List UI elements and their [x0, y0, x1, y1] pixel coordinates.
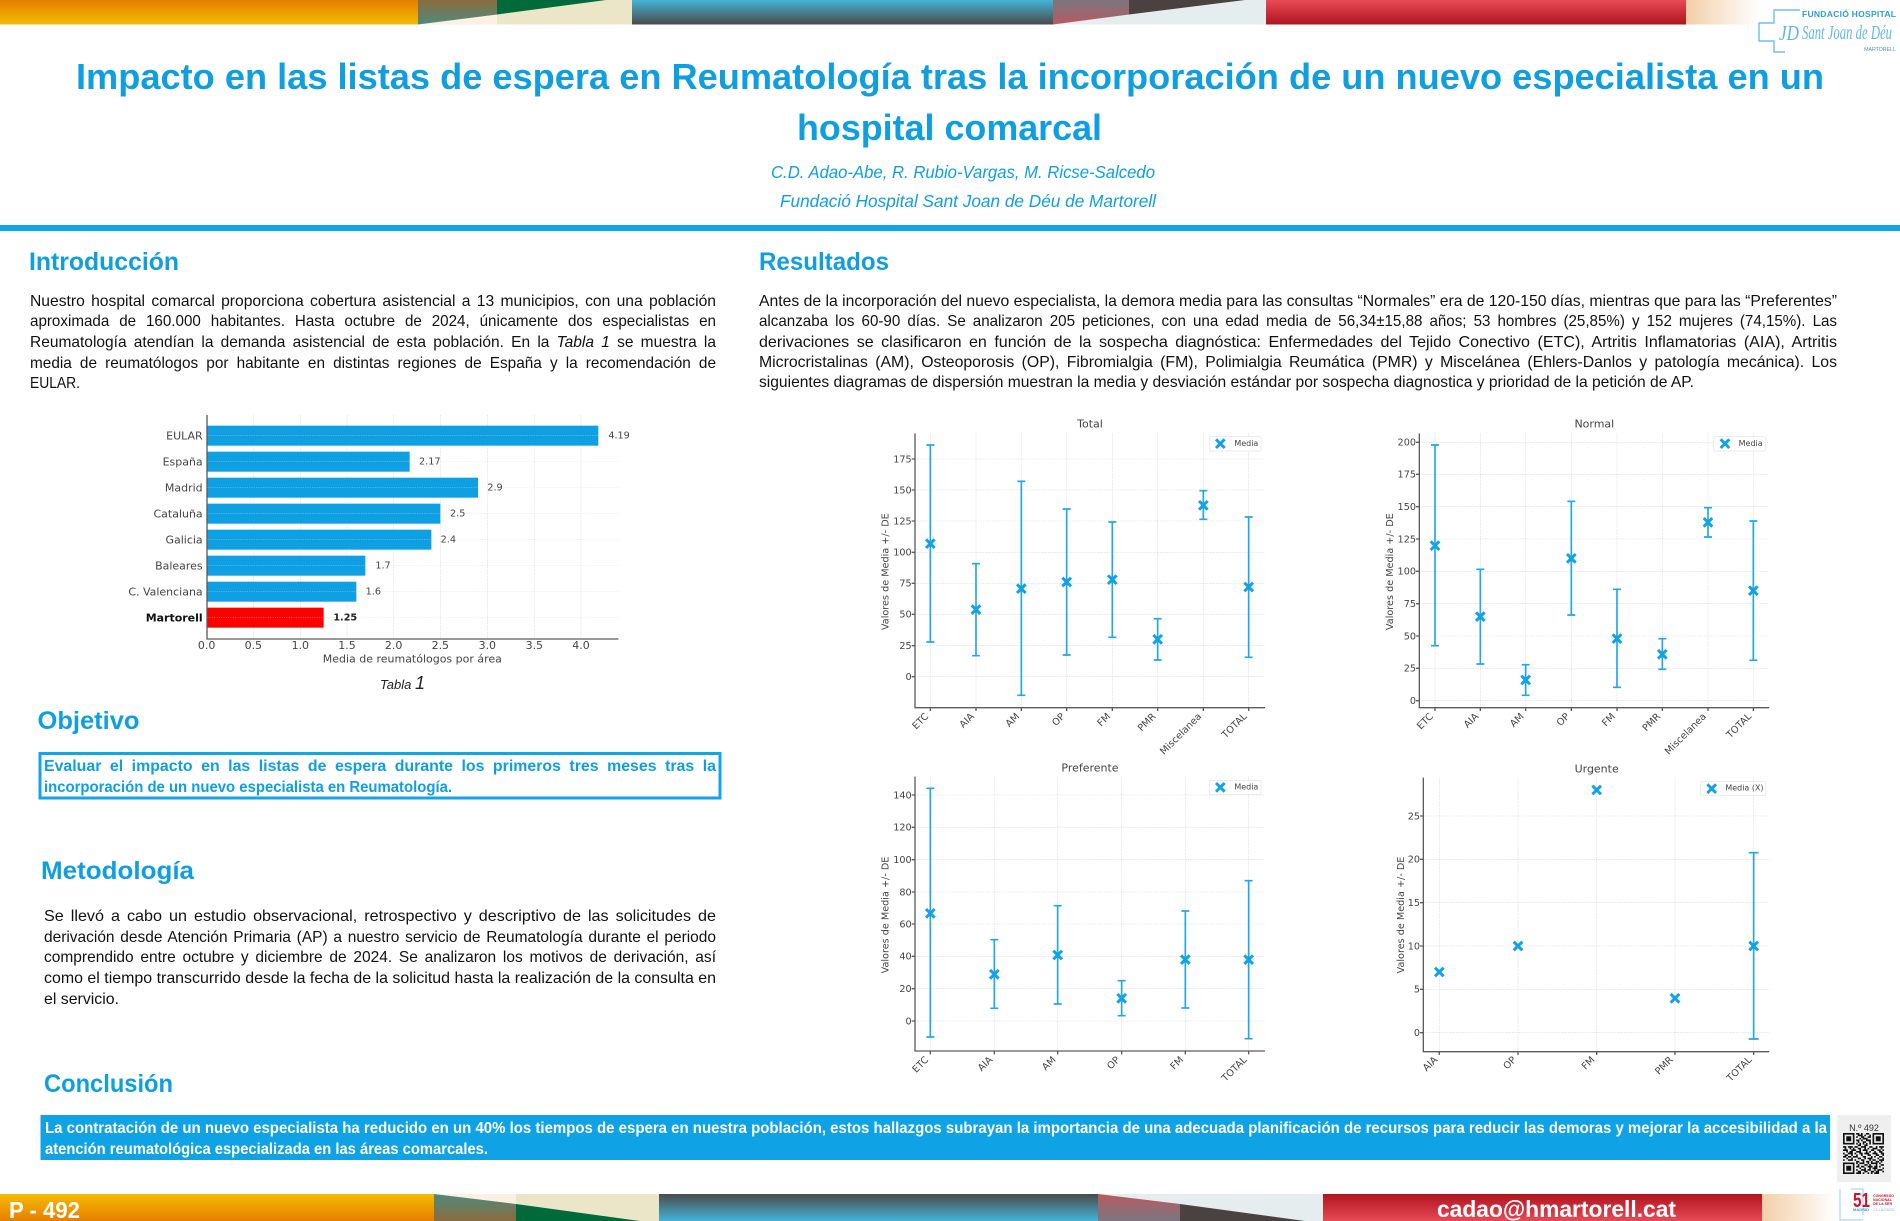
- x axis labels: FM: [1096, 711, 1113, 729]
- value labels: 2.4: [441, 534, 456, 545]
- x axis labels: [910, 1054, 1250, 1085]
- y axis ticks: 140: [893, 790, 912, 801]
- title: [76, 56, 1824, 148]
- conclusion box: La contratación de un nuevo especialista ha reducido en un 40% los tiempos de espera en nuestra población, estos hallazgos subrayan la importancia de una adecuada planificación de recursos para reducir las demoras y mejorar la accesibilidad a la: [45, 1120, 1827, 1137]
- y axis ticks: 40: [899, 952, 912, 963]
- results text: [759, 293, 1837, 391]
- hospital logo: MARTORELL: [1864, 47, 1896, 53]
- y axis ticks: 60: [899, 919, 912, 930]
- x axis labels: AIA: [1462, 711, 1481, 730]
- category labels: [128, 429, 203, 625]
- category labels: España: [163, 455, 203, 468]
- x axis labels: OP: [1105, 1055, 1123, 1072]
- y axis ticks: 5: [1414, 985, 1420, 996]
- y axis ticks: 175: [1398, 470, 1416, 481]
- legend: Media: [1234, 439, 1258, 448]
- y axis ticks: 100: [1398, 567, 1416, 578]
- conclusion box: atención reumatológica especializada en las áreas comarcales.: [45, 1141, 488, 1158]
- x axis labels: TOTAL: [1724, 711, 1755, 741]
- x axis labels: OP: [1050, 711, 1068, 729]
- x axis labels: AM: [1004, 711, 1022, 730]
- introduction text: aproximada de 160.000 habitantes. Hasta octubre de 2024, únicamente dos especialistas en: [30, 313, 716, 330]
- x axis ticks: 1.0: [292, 639, 309, 652]
- category labels: Martorell: [146, 612, 203, 625]
- y axis ticks: 0: [906, 672, 912, 683]
- mean markers: [926, 501, 1253, 644]
- x axis ticks: 3.5: [526, 639, 543, 652]
- chart: Normal: [1385, 418, 1769, 757]
- hospital logo: [1759, 8, 1896, 53]
- x axis labels: [1421, 1054, 1755, 1085]
- legend: Media (X): [1725, 784, 1764, 793]
- legend: Media: [1739, 439, 1763, 448]
- x axis labels: TOTAL: [1219, 711, 1250, 741]
- x axis labels: FM: [1580, 1055, 1597, 1072]
- x axis ticks: 2.0: [385, 639, 402, 652]
- category labels: Madrid: [165, 481, 203, 494]
- y axis ticks: 50: [899, 610, 912, 621]
- x axis labels: PMR: [1136, 711, 1159, 734]
- hospital logo: FUNDACIÓ HOSPITAL: [1802, 8, 1896, 19]
- value labels: 1.6: [366, 586, 381, 597]
- chart: Urgente: [1396, 763, 1769, 1085]
- error bars: [926, 445, 1253, 695]
- authors: Fundació Hospital Sant Joan de Déu de Martorell: [780, 191, 1157, 211]
- y axis ticks: 0: [1410, 696, 1416, 707]
- x axis labels: TOTAL: [1219, 1054, 1250, 1085]
- congress logo: 13-16/05/25: [1873, 1207, 1895, 1212]
- y axis ticks: [1408, 811, 1420, 1039]
- x axis ticks: 1.5: [338, 639, 356, 652]
- x axis labels: AIA: [976, 1054, 995, 1074]
- congress logo: 51: [1853, 1190, 1870, 1212]
- y axis ticks: 50: [1404, 631, 1416, 642]
- QR code panel: [1837, 1115, 1891, 1182]
- x axis labels: PMR: [1641, 711, 1663, 734]
- value labels: 2.5: [450, 508, 465, 519]
- introduction text: Nuestro hospital comarcal proporciona cobertura asistencial a 13 municipios, con una población: [30, 293, 716, 310]
- introduction text: media de reumatólogos por habitante en distintas regiones de España y la recomendación de: [30, 355, 716, 372]
- error bars: [926, 788, 1253, 1039]
- y axis ticks: [893, 790, 912, 1027]
- mean markers: [1435, 786, 1758, 1003]
- objective box: incorporación de un nuevo especialista en Reumatología.: [44, 779, 452, 796]
- category labels: EULAR: [166, 429, 203, 442]
- legend: [1714, 437, 1765, 451]
- x axis labels: Miscelanea: [1663, 711, 1709, 757]
- y axis ticks: 200: [1398, 438, 1416, 449]
- x axis labels: FM: [1169, 1055, 1186, 1072]
- x axis ticks: 0.5: [245, 639, 262, 652]
- y axis ticks: [1398, 438, 1416, 707]
- title: hospital comarcal: [797, 107, 1102, 148]
- authors: [771, 162, 1157, 211]
- congress logo: [1840, 1189, 1895, 1220]
- title: Preferente: [1061, 762, 1119, 775]
- y axis ticks: 75: [1404, 599, 1416, 610]
- heading: Resultados: Resultados: [759, 248, 889, 276]
- x axis ticks: 0.0: [198, 639, 215, 652]
- x axis ticks: [198, 639, 590, 652]
- x axis labels: [910, 711, 1250, 757]
- objective box: [40, 754, 720, 798]
- y axis ticks: 15: [1408, 898, 1420, 909]
- hospital logo: JD: [1779, 21, 1799, 45]
- bars: [207, 426, 598, 628]
- title: Urgente: [1575, 763, 1619, 776]
- table caption: Tabla 1: [380, 673, 425, 693]
- results text: siguientes diagramas de dispersión muestran la media y desviación estándar por sospecha diagnostica y prioridad de la petición de AP.: [759, 374, 1694, 391]
- authors: C.D. Adao-Abe, R. Rubio-Vargas, M. Ricse-Salcedo: [771, 162, 1155, 182]
- y axis ticks: 25: [1404, 664, 1416, 675]
- y axis ticks: 75: [899, 579, 912, 590]
- y axis ticks: 80: [899, 887, 912, 898]
- conclusion box: [40, 1115, 1830, 1160]
- y axis ticks: 120: [893, 823, 912, 834]
- results text: derivaciones se clasificaron en función de la sospecha diagnóstica: Enfermedades del Tejido Conectivo (ETC), Artritis Inflamatorias (AIA), Artritis: [759, 334, 1837, 351]
- y axis label: Valores de Media +/- DE: [881, 857, 892, 973]
- introduction text: [30, 293, 716, 392]
- error bars: [1749, 853, 1759, 1039]
- title: Normal: [1574, 418, 1614, 431]
- y axis ticks: 125: [1398, 534, 1416, 545]
- y axis ticks: 100: [893, 855, 912, 866]
- value labels: 1.7: [375, 560, 391, 571]
- results text: alcanzaba los 60-90 días. Se analizaron 205 peticiones, con una edad media de 56,34±15,88 años; 53 hombres (25,85%) y 152 mujeres (74,15%). Las: [759, 313, 1837, 330]
- y axis ticks: 20: [899, 984, 912, 995]
- icon: QR code: [1843, 1134, 1884, 1173]
- introduction text: Reumatología atendían la demanda asistencial de esta población. En la Tabla 1 se muestra la: [30, 334, 716, 351]
- y axis ticks: 0: [1414, 1028, 1420, 1039]
- y axis label: Valores de Media +/- DE: [1385, 513, 1396, 630]
- x axis labels: ETC: [910, 1054, 931, 1075]
- x axis labels: AIA: [958, 711, 977, 730]
- category labels: C. Valenciana: [128, 585, 203, 598]
- footer colour band: [0, 1194, 1836, 1221]
- y axis ticks: 150: [1398, 502, 1416, 513]
- title: Impacto en las listas de espera en Reumatología tras la incorporación de un nuevo especialista en un: [76, 56, 1824, 97]
- methodology text: derivación desde Atención Primaria (AP) a nuestro servicio de Reumatología durante el periodo: [44, 929, 716, 946]
- heading: Introducción: Introducción: [29, 248, 179, 276]
- value labels: 2.17: [419, 456, 441, 467]
- methodology text: [44, 908, 717, 1008]
- x axis labels: PMR: [1653, 1054, 1676, 1077]
- chart: Preferente: [881, 762, 1265, 1085]
- methodology text: como el tiempo transcurrido desde la fecha de la solicitud hasta la realización de la consulta en: [44, 970, 716, 987]
- bar chart: reumatólogos por área: [128, 415, 630, 665]
- category labels: Galicia: [165, 533, 203, 546]
- y axis ticks: 175: [893, 454, 912, 465]
- x axis label: Media de reumatólogos por área: [323, 652, 502, 665]
- congress logo: MADRID: [1853, 1207, 1869, 1212]
- x axis labels: OP: [1502, 1055, 1519, 1072]
- congress logo: CONGRESO: [1873, 1194, 1894, 1198]
- heading: Objetivo: Objetivo: [38, 707, 140, 735]
- x axis labels: TOTAL: [1724, 1054, 1755, 1085]
- y axis ticks: 0: [906, 1016, 912, 1027]
- y axis ticks: 25: [1408, 811, 1420, 822]
- methodology text: el servicio.: [44, 991, 119, 1008]
- x axis labels: [1415, 711, 1755, 757]
- x axis labels: AIA: [1421, 1054, 1440, 1074]
- y axis ticks: 100: [893, 548, 912, 559]
- x axis ticks: 3.0: [479, 639, 496, 652]
- title: Total: [1076, 418, 1103, 431]
- error bars: [1431, 445, 1757, 695]
- category labels: Cataluña: [154, 507, 203, 520]
- x axis ticks: 2.5: [432, 639, 449, 652]
- y axis label: Valores de Media +/- DE: [881, 513, 892, 630]
- legend: Media: [1234, 782, 1258, 791]
- x axis labels: AM: [1040, 1055, 1058, 1073]
- y axis ticks: 20: [1408, 855, 1420, 866]
- legend: [1701, 782, 1766, 796]
- results text: Antes de la incorporación del nuevo especialista, la demora media para las consultas “Normales” era de 120-150 días, mientras que para las “Preferentes”: [759, 293, 1837, 310]
- y axis ticks: 150: [893, 485, 912, 496]
- y axis label: Valores de Media +/- DE: [1396, 857, 1407, 973]
- methodology text: Se llevó a cabo un estudio observacional, retrospectivo y descriptivo de las solicitudes de: [44, 908, 716, 925]
- x axis ticks: 4.0: [572, 639, 590, 652]
- category labels: Baleares: [155, 559, 203, 572]
- x axis labels: Miscelanea: [1158, 711, 1204, 757]
- x axis labels: ETC: [1415, 711, 1436, 732]
- objective box: Evaluar el impacto en las listas de espera durante los primeros tres meses tras la: [44, 758, 716, 775]
- value labels: 4.19: [608, 430, 630, 441]
- value labels: 2.9: [487, 482, 503, 493]
- header rule: [0, 225, 1900, 231]
- value labels: [333, 430, 630, 623]
- mean markers: [1431, 518, 1758, 684]
- QR code panel: N.º 492: [1849, 1123, 1879, 1133]
- y axis ticks: 25: [899, 641, 912, 652]
- y axis ticks: [893, 454, 912, 683]
- header colour band: [0, 0, 1760, 24]
- legend: [1209, 780, 1261, 794]
- chart: Total: [881, 418, 1265, 757]
- x axis labels: AM: [1508, 711, 1526, 730]
- value labels: 1.25: [333, 612, 357, 623]
- legend: [1209, 437, 1261, 451]
- heading: Metodología: Metodología: [41, 857, 195, 885]
- methodology text: comprendido entre octubre y diciembre de 2024. Se analizaron los motivos de derivación, así: [44, 949, 717, 966]
- introduction text: EULAR.: [30, 375, 80, 392]
- congress logo: DE LA SER: [1873, 1202, 1892, 1206]
- y axis ticks: 125: [893, 516, 912, 527]
- congress logo: NACIONAL: [1873, 1198, 1893, 1202]
- results text: Microcristalinas (AM), Osteoporosis (OP), Fibromialgia (FM), Polimialgia Reumática (PMR) y Miscelánea (Ehlers-Danlos y patología mecánica). Los: [759, 354, 1837, 371]
- x axis labels: FM: [1600, 711, 1618, 729]
- y axis ticks: 10: [1408, 941, 1420, 952]
- x axis labels: ETC: [910, 711, 931, 732]
- x axis labels: OP: [1555, 711, 1572, 729]
- heading: Conclusión: Conclusión: [44, 1070, 173, 1098]
- mean markers: [926, 909, 1253, 1003]
